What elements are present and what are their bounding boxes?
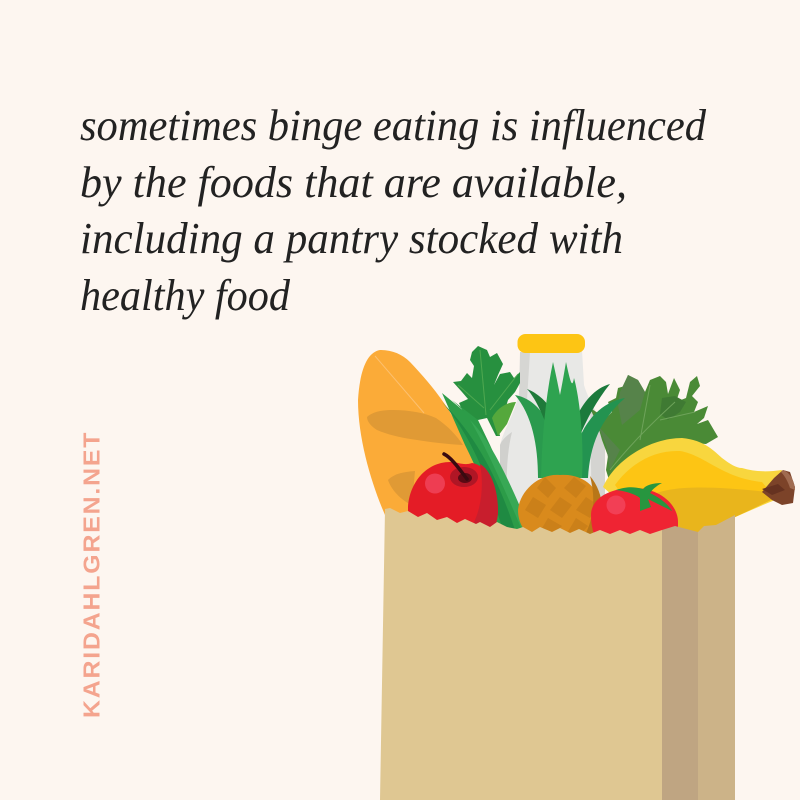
illustration: grocery bag of food xyxy=(358,334,795,800)
bag front panel xyxy=(380,508,662,800)
title xyxy=(80,101,707,320)
icon: banana xyxy=(603,438,795,535)
icon: parsley xyxy=(453,346,520,436)
title: by the foods that are available, xyxy=(80,158,627,207)
bag side panel xyxy=(662,526,698,800)
pineapple fronds xyxy=(515,395,558,478)
icon: bread loaf xyxy=(358,350,505,530)
pineapple body xyxy=(518,475,603,535)
website credit: KARIDAHLGREN.NET xyxy=(79,431,105,718)
panel: paper bag xyxy=(380,508,735,800)
title: including a pantry stocked with xyxy=(80,214,623,263)
icon: milk bottle xyxy=(500,334,605,530)
title: healthy food xyxy=(80,271,291,320)
icon: pineapple xyxy=(515,362,625,535)
title: sometimes binge eating is influenced xyxy=(80,101,707,150)
icon: red apple xyxy=(408,454,498,530)
icon: kale leaves xyxy=(590,375,718,490)
icon: tomato xyxy=(591,483,678,535)
banana stem xyxy=(762,470,795,505)
icon: spring onions xyxy=(442,393,530,530)
